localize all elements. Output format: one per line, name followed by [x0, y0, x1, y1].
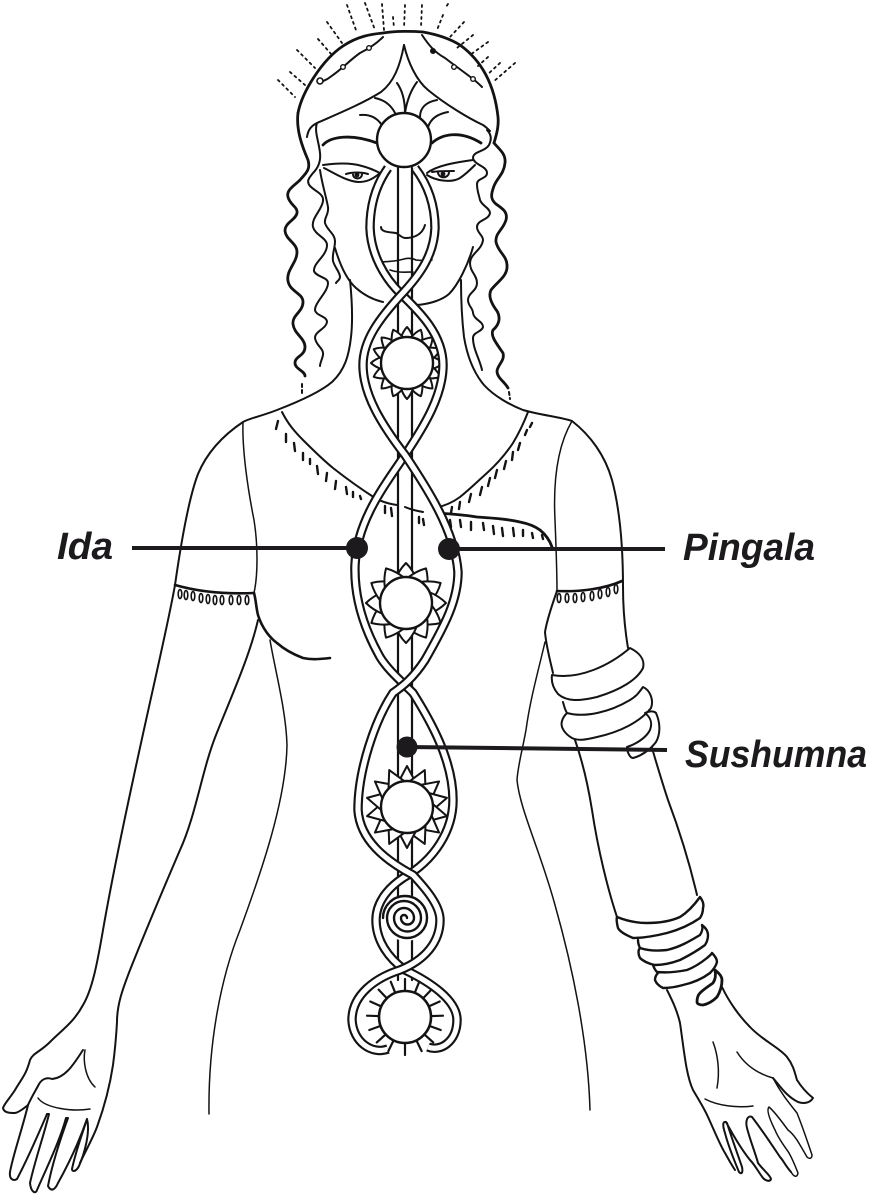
thumb — [28, 1050, 83, 1105]
right palm creases — [705, 1042, 753, 1107]
right sleeve loops — [557, 584, 618, 602]
strand B over — [352, 168, 458, 1050]
jaw — [335, 247, 473, 305]
chakra: root with rays — [367, 979, 443, 1055]
right hand fingers — [768, 1078, 812, 1176]
wrist bangle end — [697, 970, 722, 1005]
chakra: throat circle — [381, 337, 433, 389]
face: brows, eyes, nose, mouth, chin — [323, 82, 481, 305]
left sleeve loops — [178, 590, 249, 604]
lips — [375, 258, 432, 272]
head outline and outer hair — [285, 31, 510, 399]
left outer hair — [285, 113, 309, 376]
right hand outline — [667, 990, 735, 1170]
forehead branches — [360, 82, 448, 127]
leader line and dot: Ida — [132, 537, 368, 559]
chakra: navel circle — [381, 781, 433, 833]
sleeve seams — [243, 422, 257, 593]
eyebrows — [323, 137, 377, 145]
nose — [381, 225, 425, 238]
left inner hair — [307, 123, 328, 366]
sleeve edges — [175, 585, 254, 593]
sushumna central channel — [398, 168, 412, 980]
neck and left shoulder — [175, 280, 352, 585]
bust — [254, 593, 330, 659]
neckline — [282, 412, 397, 505]
chakra: third eye — [377, 113, 431, 167]
lower bangles — [617, 897, 703, 938]
chakra petals: navel — [365, 766, 449, 848]
right arm and hand — [545, 587, 813, 1181]
chakra: sacral spiral — [383, 895, 429, 941]
chakra petals: heart — [366, 563, 446, 643]
label: Ida: Ida — [57, 526, 113, 568]
crown rays — [278, 3, 515, 97]
body sides — [209, 640, 287, 1114]
right outer hair — [490, 143, 508, 388]
label: Pingala: Pingala — [683, 527, 815, 569]
strand A under — [355, 168, 457, 1048]
leader line and dot: Sushumna — [396, 736, 667, 758]
palm creases — [38, 1050, 95, 1110]
neck and right shoulder — [461, 280, 623, 587]
hair bead strings — [320, 37, 383, 82]
fingers — [10, 1105, 88, 1192]
leader line and dot: Pingala — [438, 538, 665, 560]
hairline — [317, 45, 404, 123]
chakra: heart circle — [380, 577, 432, 629]
neckline beads — [276, 421, 543, 539]
chakra petals: throat — [371, 327, 443, 399]
right inner hair — [468, 130, 491, 370]
neck, shoulders and torso — [175, 280, 623, 1114]
left arm and hand — [3, 585, 258, 1192]
ida and pingala intertwined channels — [352, 168, 458, 1050]
upper bangles — [552, 648, 643, 700]
eyes — [323, 164, 380, 182]
